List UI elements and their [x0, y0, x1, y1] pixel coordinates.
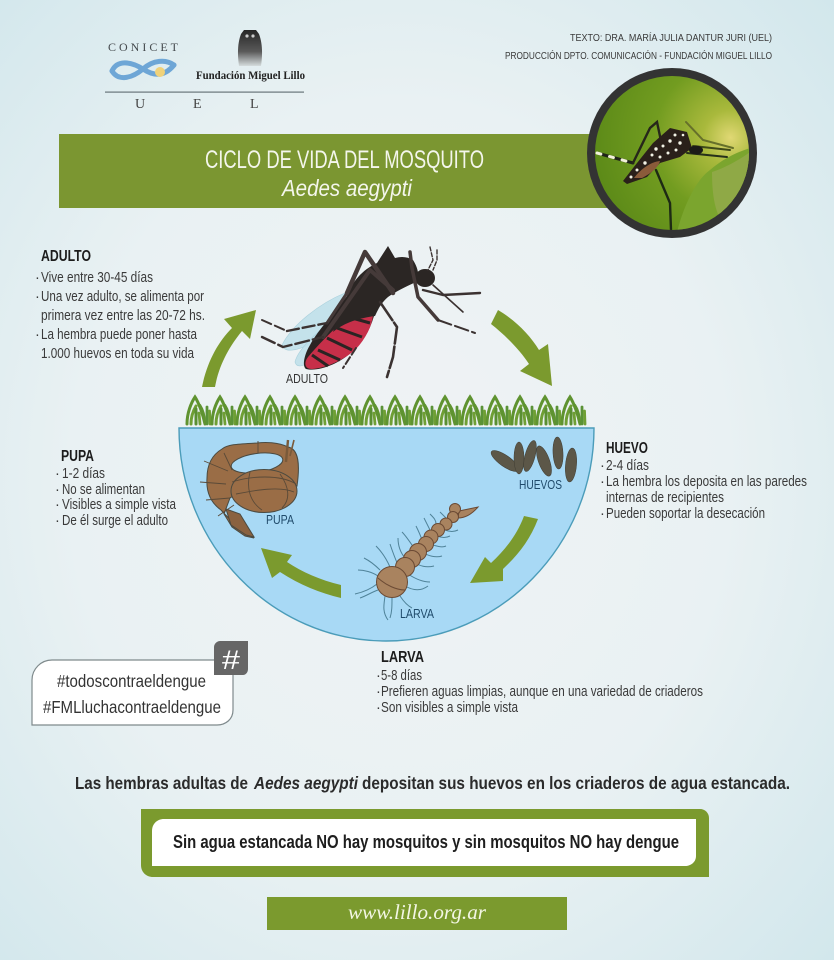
credits: TEXTO: DRA. MARÍA JULIA DANTUR JURI (UEL): [570, 31, 772, 44]
panel: adult text: [35, 248, 205, 362]
list: larva: ·: [376, 684, 381, 700]
label: adulto: ADULTO: [286, 371, 328, 386]
list: pupa: 1-2 días: [62, 466, 105, 482]
list: larva: ·: [376, 668, 381, 684]
list: pupa: De él surge el adulto: [62, 513, 168, 529]
list: pupa: ·: [55, 466, 60, 482]
list: pupa: ·: [55, 482, 60, 498]
list: huevo: Pueden soportar la desecación: [606, 506, 765, 522]
logo: CONICET: CONICET: [108, 40, 179, 54]
illustration: larva: [355, 504, 478, 621]
website bar: www.lillo.org.ar: [348, 900, 487, 924]
arrow: eggs to larva: [470, 516, 538, 583]
title banner: [59, 134, 619, 208]
illustration: eggs: [488, 437, 578, 492]
title banner: CICLO DE VIDA DEL MOSQUITO: [205, 146, 484, 174]
larva hairs: [355, 512, 458, 620]
list: adulto: Vive entre 30-45 días: [41, 270, 153, 286]
logo: UEL: [135, 97, 259, 112]
list: adulto: Una vez adulto, se alimenta por: [41, 289, 204, 305]
title banner: Aedes aegypti: [280, 175, 413, 201]
pupa ring opening: [230, 450, 284, 476]
list: pupa: Visibles a simple vista: [62, 497, 177, 513]
list: larva: Prefieren aguas limpias, aunque en una variedad de criaderos: [381, 684, 703, 700]
list: adulto: 1.000 huevos en toda su vida: [41, 346, 195, 362]
list: huevo: ·: [600, 474, 605, 490]
logo: UEL: L: [250, 97, 259, 112]
icon: hash tag: #: [222, 645, 240, 675]
callout: slogan: [141, 809, 709, 877]
arrow: adult to eggs: [491, 310, 552, 386]
hashtag text: [43, 671, 221, 717]
abdomen: [304, 292, 375, 370]
list: adulto: primera vez entre las 20-72 hs.: [41, 308, 205, 324]
list: adulto: La hembra puede poner hasta: [41, 327, 198, 343]
list: larva: ·: [376, 700, 381, 716]
statement: Las hembras adultas de: [75, 773, 248, 793]
wings: [282, 293, 348, 366]
list: adulto: [35, 270, 205, 362]
illustration: pupa: [200, 440, 298, 538]
logos: [105, 30, 305, 112]
list: pupa: ·: [55, 513, 60, 529]
arrow: pupa to adult: [202, 310, 256, 387]
hashtag text: #todoscontraeldengue: [57, 671, 206, 691]
panel: larva text: [376, 649, 703, 716]
label: pupa: PUPA: [266, 512, 294, 527]
illustration: adult mosquito: [262, 246, 480, 386]
heading: huevo: HUEVO: [606, 440, 648, 457]
callout: hashtags: [32, 641, 248, 725]
credits: [505, 31, 772, 62]
credits: PRODUCCIÓN DPTO. COMUNICACIÓN - FUNDACIÓN MIGUEL LILLO: [505, 49, 772, 62]
hashtag text: #FMLluchacontraeldengue: [43, 697, 221, 717]
website bar: [267, 897, 567, 930]
photo: mosquito on leaf: [587, 68, 760, 240]
statement: [75, 773, 790, 793]
logo: UEL: U: [135, 97, 145, 112]
list: larva: Son visibles a simple vista: [381, 700, 519, 716]
callout: slogan: Sin agua estancada NO hay mosquitos y sin mosquitos NO hay dengue: [173, 832, 679, 852]
panel: pupa text: [55, 448, 177, 529]
list: pupa: No se alimentan: [62, 482, 145, 498]
list: huevo: 2-4 días: [606, 458, 649, 474]
list: adulto: ·: [35, 289, 40, 305]
list: pupa: [55, 466, 177, 529]
icon: hash tag: [214, 641, 248, 675]
thorax and head: [333, 246, 418, 332]
list: huevo: ·: [600, 506, 605, 522]
logo: Fundación Miguel Lillo: Fundación Miguel Lillo: [196, 68, 305, 82]
statement: Aedes aegypti: [253, 773, 359, 793]
label: huevos: HUEVOS: [519, 477, 562, 492]
heading: larva: LARVA: [381, 649, 424, 666]
arrow: larva to pupa: [261, 548, 341, 598]
list: pupa: ·: [55, 497, 60, 513]
logo: UEL: E: [193, 97, 202, 112]
list: adulto: ·: [35, 327, 40, 343]
mosquito body: [623, 128, 692, 184]
list: adulto: ·: [35, 270, 40, 286]
list: huevo: ·: [600, 458, 605, 474]
heading: pupa: PUPA: [61, 448, 94, 465]
list: larva: [376, 668, 703, 716]
illustration: grass: [187, 397, 585, 424]
larva body: [376, 504, 478, 598]
list: huevo: [600, 458, 807, 522]
illustration: water bowl: [179, 428, 594, 641]
logo: Fundación Miguel Lillo: [196, 30, 305, 82]
list: larva: 5-8 días: [381, 668, 422, 684]
list: huevo: internas de recipientes: [606, 490, 724, 506]
heading: adulto: ADULTO: [41, 248, 91, 265]
logo: CONICET: [108, 40, 179, 78]
label: larva: LARVA: [400, 606, 434, 621]
panel: huevo text: [600, 440, 807, 522]
legs: [262, 247, 480, 377]
